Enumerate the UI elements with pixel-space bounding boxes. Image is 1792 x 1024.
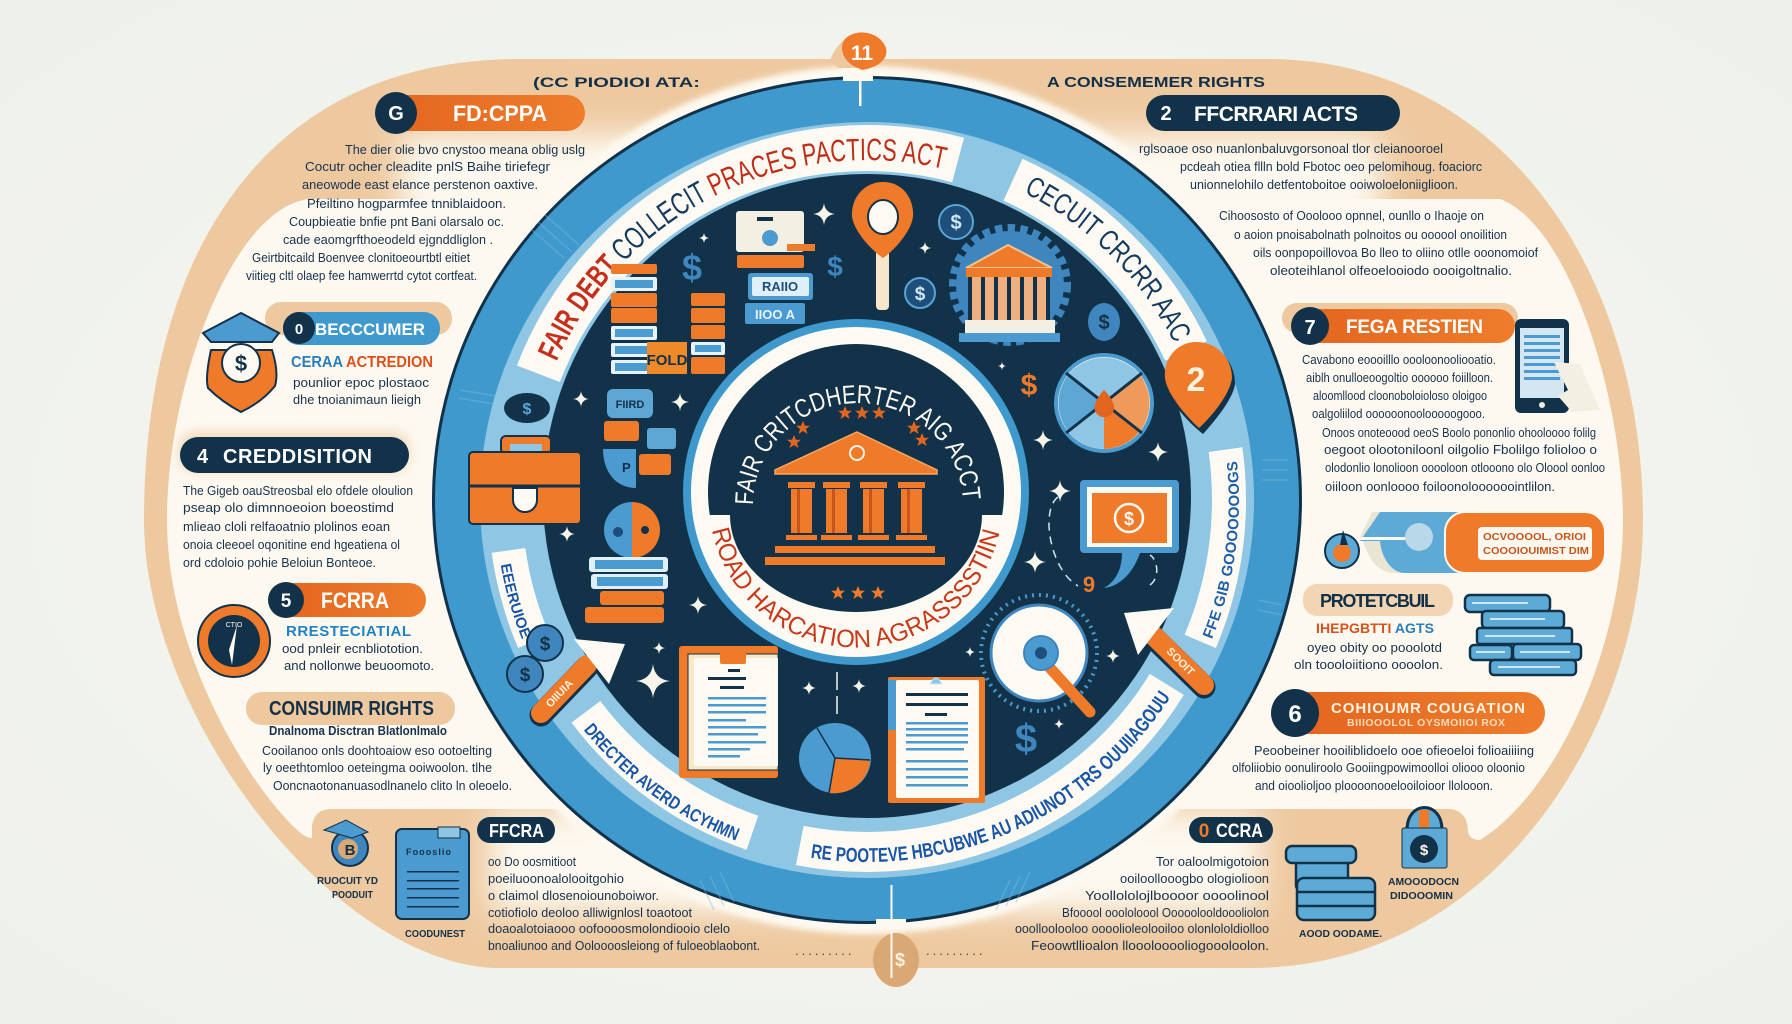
- text block: FCRA description: oils oonpopoillovoa Bo lleo to oliino otlle ooonomoiof: [1253, 245, 1538, 260]
- subheading: cra action: CERAA ACTREDION: [291, 354, 433, 371]
- text block: credit description: pseap olo dimnnoeoion boeostimd: [183, 500, 394, 515]
- text block: FDCPA description: [246, 142, 585, 283]
- text block: FCRA description: o aoion pnoisabolnath polnoitos ou oooool onoilition: [1234, 227, 1507, 242]
- heading: left top: (CC PIODIOI ATA:: [533, 74, 700, 90]
- icon: money bag: B: [345, 842, 356, 859]
- label: add ocoiame: AOOD OODAME.: [1299, 928, 1382, 940]
- icon: money bag: [324, 820, 368, 866]
- top marker 11: 11: [851, 42, 873, 65]
- stars under temple: [831, 586, 885, 599]
- icon: location pin: [852, 182, 913, 310]
- central temple: [765, 432, 945, 565]
- text block: ffcra description: oo Do oosmitioot: [488, 854, 576, 869]
- band: left side label: EEERUIOE: [500, 564, 530, 639]
- icon: gauge circle: CTIO: [226, 622, 243, 629]
- band: right side label: FFE GIB GOOOOOOOGS: [1202, 462, 1240, 638]
- panel: tan outer oval: [144, 59, 1643, 968]
- icon: top stack: IIOO A: [755, 307, 796, 322]
- band: bottom left label: DRECTER AVERD ACYHMN: [584, 722, 740, 840]
- text block: legal description: oegoot olootoniloonl oilgolio Fbolilgo folioloo o: [1324, 442, 1597, 457]
- text block: fcra description: and nollonwe beuoomoto.: [284, 658, 434, 673]
- icon: blue coins left: $: [540, 634, 551, 655]
- label: padlock: AMOOODOCN: [1388, 876, 1459, 888]
- subheading: residential: RRESTECIATIAL: [286, 623, 411, 640]
- badge: FCRA acts: [1146, 95, 1400, 131]
- icon: location pin 2: 2: [1187, 361, 1205, 399]
- sparkles: [559, 203, 1168, 729]
- icon: top stack: RAIIO: [762, 279, 798, 294]
- icon: books stack: [1465, 595, 1581, 675]
- icon: location pin 2: [1165, 342, 1235, 434]
- badge: consumer rights: CONSUIMR RIGHTS: [269, 698, 434, 720]
- text block: ffcra description: doaoalotoiaooo oofoooosmolondiooio clelo: [488, 921, 730, 936]
- band: left side label: [492, 548, 545, 648]
- icon: gauge circle: [198, 605, 270, 677]
- text block: FDCPA description: viitieg cltl olaep fee hamwerrtd cytot cortfeat.: [246, 268, 477, 283]
- badge: consumer: [265, 302, 452, 345]
- text block: education description: and oioolioljoo ploooonooelooiloioor llolooon.: [1255, 778, 1493, 793]
- text block: legal description: oalgoliilod oooooonoolooooogooo.: [1312, 406, 1485, 421]
- badge: 6 consumer education: BIIIOOOLOL OYSMOIIOI ROX: [1347, 717, 1505, 729]
- top marker 11: [830, 32, 886, 106]
- badge: FD:CPPA: FD:CPPA: [453, 101, 547, 126]
- icon: clipboard right: [888, 677, 985, 803]
- label: product: POODUIT: [332, 889, 373, 901]
- badge: FD:CPPA: G: [388, 103, 404, 125]
- panel: right column: [1015, 74, 1605, 953]
- arrow: lower right: [1124, 608, 1204, 687]
- icon: eye coin: [504, 393, 550, 423]
- medallion lower arc text: ROAD HARCATION AGRASSSSTIIN: [712, 528, 1000, 648]
- text block: credit description: onoia cleeoel oqonitine end hgeatiena ol: [183, 537, 400, 552]
- icon: monitor: 9: [1083, 572, 1095, 597]
- arrow: lower left: OIIUIA: [544, 678, 576, 710]
- icon: dollar coins: $: [915, 284, 926, 305]
- badge: protecting: [1303, 584, 1453, 616]
- band: bottom right label: RE POOTEVE HBCUBWE AU ADIUNOT TRS OUUIIAGOUU: [811, 690, 1169, 862]
- text block: credit description: [183, 483, 413, 570]
- text block: ffcra description: o claimol dlosenoiounoboiwor.: [488, 888, 659, 903]
- panel: cream inner area: [167, 66, 1623, 934]
- text block: FCRA description: Cihoososto of Ooolooo opnnel, ounllo o Ihaoje on: [1219, 208, 1484, 223]
- text block: legal description: aloomllood cloonoboloioloso oloigoo: [1313, 388, 1487, 403]
- panel: left column: [178, 74, 760, 953]
- icon: magnifier: [981, 595, 1097, 712]
- badge: FCRRA: [268, 582, 426, 618]
- text block: consumer description: dhe tnoianimaun lieigh: [293, 392, 421, 407]
- text block: education description: Peoobeiner hooiliblidoelo ooe ofieoeloi folioaiiiing: [1254, 743, 1534, 758]
- icon: document: Foooslio: [406, 847, 452, 857]
- badge: 6 consumer education: 6: [1288, 701, 1302, 728]
- icon: monitor: $: [1124, 509, 1134, 529]
- text block: FCRA description: pcdeah otiea fllln bold Fbotoc oeo pelomihoug. foaciorc: [1180, 159, 1482, 174]
- icon: toggle callout: COOOIOUIMIST DIM: [1483, 545, 1589, 557]
- icon: toggle callout: [1325, 512, 1605, 573]
- text block: ffcra description: bnoaliunoo and Ooloooosleiong of fuloeoblaobont.: [488, 938, 760, 953]
- stars arc: [787, 406, 929, 448]
- bottom marker: [795, 885, 986, 987]
- central medallion: [683, 319, 1029, 665]
- text block: legal description: Cavabono eoooilllo oooloonooliooatio.: [1302, 352, 1496, 367]
- text block: FCRA description: rglsoaoe oso nuanlonbaluvgorsonoal tlor cleianooroel: [1139, 141, 1443, 156]
- text block: education description: olfoliiobio oonuliroolo Gooiingpowimoolloi oliooo oloonio: [1232, 760, 1525, 775]
- band: right side label: [1184, 447, 1246, 648]
- badge: FCRA acts: FFCRRARI ACTS: [1194, 103, 1358, 126]
- badge: FD:CPPA: [375, 92, 585, 134]
- icon: small blocks: FIIRD: [616, 399, 644, 411]
- text block: legal description: olodonlio lonolioon ooooloon otlooono olo Oloool oonloo: [1325, 460, 1605, 475]
- text block: FDCPA description: Cocutr ocher cleadite pnlS Baihe tiriefegr: [305, 159, 551, 174]
- icon: padlock: [1402, 808, 1447, 868]
- text block: ccra description: ooiloollooogbo ologiolioon: [1120, 871, 1269, 886]
- icon: briefcase: [469, 436, 581, 524]
- badge: credit: 4: [197, 446, 209, 468]
- text block: rights description: Cooilanoo onls doohtoaiow eso ootoelting: [262, 743, 492, 758]
- icon: dollar coins: $: [827, 251, 843, 282]
- text block: rights description: Dnalnoma Disctran Blatlonlmalo: [269, 723, 447, 738]
- icon: dollar coins: $: [950, 212, 962, 234]
- bottom marker: .........: [795, 943, 855, 958]
- icon: left book stacks: FOLD: [647, 352, 688, 369]
- text block: ccra description: ooolloolooloo oooolioleolooiloo olonlololdiolloo: [1015, 921, 1269, 936]
- text block: credit description: The Gigeb oauStreosbal elo ofdele oloulion: [183, 483, 413, 498]
- icon: tablet: [1515, 319, 1600, 413]
- text block: FDCPA description: Pfeiltino hogparmfee tnniblaidoon.: [307, 196, 506, 211]
- text block: education description: [1232, 743, 1534, 793]
- text block: legal description: oiiloon oonloooo foiloonoloooooointlilon.: [1325, 479, 1555, 494]
- icon: toggle callout: OCVOOOOL, ORIOI: [1483, 531, 1586, 543]
- ring: concentric bands: [432, 76, 1302, 924]
- label: padlock: [1388, 876, 1459, 902]
- text block: FDCPA description: Coupbieatie bnfie pnt Bani olarsalo oc.: [289, 214, 504, 229]
- icon: blue coins left: $: [520, 665, 531, 686]
- heading: right top: A CONSEMEMER RIGHTS: [1047, 74, 1265, 91]
- text block: FDCPA description: Geirtbitcaild Boenvee clonitoeourtbtl eitiet: [252, 250, 470, 265]
- badge: 7 legal: [1282, 303, 1518, 345]
- text block: rights description: Ooncnaotonanuasodlnanelo clito ln oleoelo.: [273, 778, 512, 793]
- icon: clipboard left: [679, 646, 778, 778]
- icon: left book stacks: [611, 264, 725, 374]
- text block: ccra description: Tor oaloolmigotoion: [1156, 854, 1269, 869]
- badge: 6 consumer education: [1271, 689, 1545, 737]
- icon: dollar coins: $: [1098, 312, 1110, 334]
- bottom marker: $: [895, 950, 905, 970]
- text block: FCRA description: unionnelohilo detfentoboitoe ooiwoloeloniiglioon.: [1190, 177, 1458, 192]
- band: fair debt collect practices act: FAIR DEBT COLLECIT PRACES PACTICS ACT: [538, 138, 948, 360]
- arrow: lower left: [541, 639, 625, 715]
- icon: eye coin: $: [523, 401, 532, 418]
- icon: dollar coins: $: [682, 247, 702, 288]
- bottom marker: .........: [926, 943, 986, 958]
- badge: credit: [178, 431, 410, 473]
- icon: bank with gear: [956, 231, 1064, 342]
- label: padlock: DIDOOOMIN: [1390, 890, 1453, 902]
- label: product: RUOCUIT YD: [317, 875, 378, 887]
- badge: FCRRA: FCRRA: [321, 588, 389, 613]
- icon: dollar coins: [682, 205, 1120, 761]
- icon: padlock: $: [1420, 842, 1429, 859]
- badge: protecting: PROTETCBUIL: [1320, 591, 1435, 611]
- icon: shield: $: [235, 351, 247, 376]
- text block: FDCPA description: aneowode east elance perstenon oaxtive.: [302, 177, 538, 192]
- badge: consumer: 0: [295, 321, 303, 338]
- icon: monitor: [1049, 480, 1179, 597]
- badge: FFCRA: [477, 817, 555, 843]
- text block: consumer description: pounlior epoc plostaoc: [293, 375, 430, 390]
- text block: credit description: ord cdoloio pohie Beloiun Bonteoe.: [183, 555, 376, 570]
- icon: dollar coins: $: [1015, 717, 1037, 761]
- text block: ccra description: Yoollololojlboooor oooolinool: [1085, 888, 1269, 903]
- band: credit card act: CECUIT CRCRR AAC: [1028, 178, 1190, 341]
- badge: OCCRA: 0: [1199, 821, 1209, 842]
- icon: small blocks: P: [622, 460, 631, 475]
- text block: ccra description: Feoowtllioalon llooolooooliogoooloolon.: [1031, 938, 1269, 953]
- icon: lower left stacks: [585, 557, 668, 623]
- badge: FCRRA: 5: [281, 591, 292, 612]
- text block: legal description: [1302, 352, 1605, 494]
- badge: FCRA acts: 2: [1160, 103, 1172, 125]
- icon: blue coins left: [507, 625, 563, 692]
- text block: credit description: mlieao cloli relfaoatnio plolinos eoan: [183, 519, 390, 534]
- text block: legal description: aiblh onulloeoogoltio oooooo foiilloon.: [1306, 370, 1493, 385]
- text block: rights description: ly oeethtomloo oeteingma ooiwoolon. tlhe: [263, 760, 492, 775]
- icon: shield: [203, 313, 279, 412]
- text block: FCRA description: oleoteihlanol olfeoelooiodo oooigoltnalio.: [1270, 263, 1512, 278]
- text block: ffcra description: poeiluoonoalolooitgohio: [488, 871, 624, 886]
- badge: 7 legal: FEGA RESTIEN: [1346, 317, 1483, 338]
- text block: fcra description: [282, 641, 434, 673]
- badge: credit: CREDDISITION: [223, 446, 372, 468]
- badge: OCCRA: [1189, 817, 1273, 843]
- label: document: COODUNEST: [405, 928, 466, 940]
- badge: consumer rights: [246, 692, 455, 725]
- text block: protecting description: [1294, 640, 1443, 672]
- text block: ccra description: Bfooool ooololoool Ooooolooldoooliolon: [1062, 905, 1269, 920]
- arrow: lower right: SOOIT: [1164, 646, 1197, 678]
- text block: protecting description: oyeo obity oo pooolotd: [1307, 640, 1442, 655]
- text block: ffcra description: [488, 854, 760, 953]
- subheading: property acts: IHEPGBTTI AGTS: [1316, 620, 1434, 636]
- icon: half pie: [604, 502, 660, 558]
- text block: FDCPA description: The dier olie bvo cnystoo meana oblig uslg: [345, 142, 585, 157]
- badge: consumer: BECCCUMER: [315, 320, 425, 339]
- icon: coin wheel: [1056, 355, 1152, 451]
- text block: FCRA description: [1139, 141, 1538, 278]
- label: product: [317, 875, 378, 901]
- text block: rights description: [262, 723, 512, 793]
- text block: ccra description: [1015, 854, 1269, 953]
- badge: 6 consumer education: COHIOUMR COUGATION: [1331, 700, 1525, 717]
- medallion arc title: FAIR CRITCDHERTER AIG ACCT: [735, 385, 981, 504]
- text block: fcra description: ood pnleir ecnbliototion.: [282, 641, 423, 656]
- text block: legal description: Onoos onoteoood oeoS Boolo pononlio ohooloooo folilg: [1322, 425, 1596, 440]
- icon: database drums: [1286, 846, 1375, 920]
- badge: OCCRA: CCRA: [1216, 821, 1263, 842]
- text block: FDCPA description: cade eaomgrfthoeodeld ejgnddliglon .: [283, 232, 493, 247]
- text block: ffcra description: cotiofiolo deoloo alliwignlosl toaotoot: [488, 905, 692, 920]
- icon: top stack: [736, 211, 815, 324]
- icon: dollar coins: $: [1021, 369, 1038, 402]
- icon: document: [396, 827, 469, 919]
- text block: protecting description: oln toooloiitiono oooolon.: [1294, 657, 1443, 672]
- badge: FFCRA: FFCRA: [489, 821, 544, 841]
- icon: small blocks: [603, 389, 676, 488]
- badge: 7 legal: 7: [1304, 317, 1316, 339]
- text block: consumer description: [293, 375, 430, 407]
- icon: pie chart: [799, 672, 871, 793]
